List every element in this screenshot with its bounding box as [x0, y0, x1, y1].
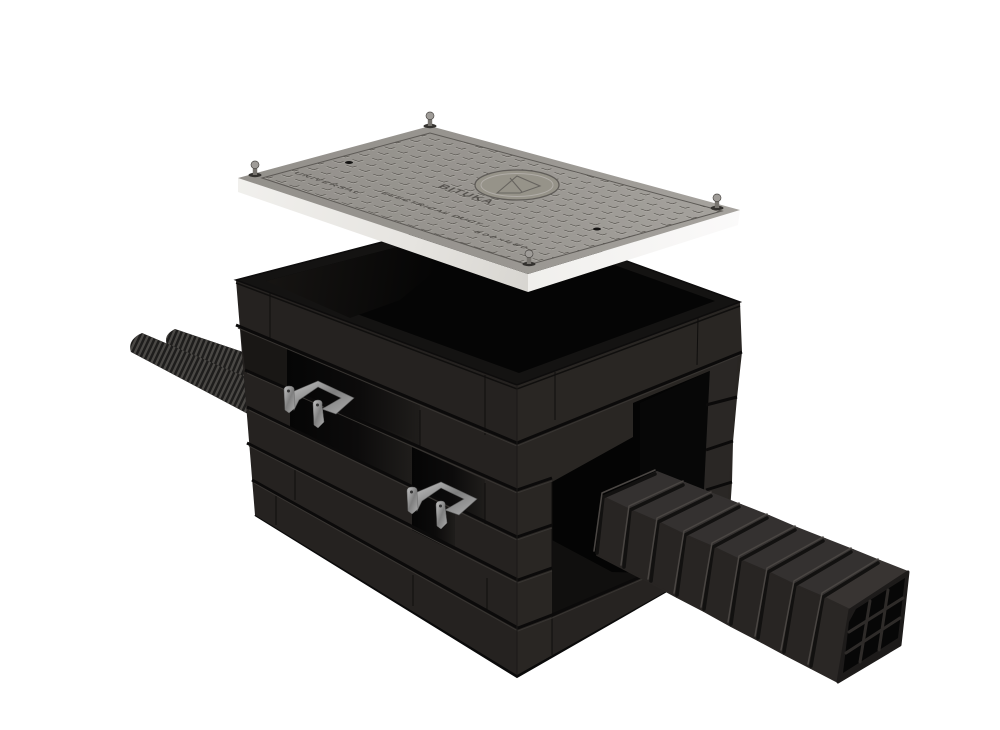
lower band under opening — [552, 573, 672, 655]
duct segment 4 — [674, 503, 769, 611]
right pillar — [703, 354, 738, 510]
duct segment 8 — [781, 548, 880, 668]
top rim band shading — [236, 283, 740, 389]
duct segment 5 — [701, 514, 797, 626]
manhole cover lid — [238, 112, 740, 292]
duct segment 1 — [594, 470, 685, 569]
base plate — [255, 515, 672, 677]
handle: upper — [284, 381, 354, 428]
open interior — [236, 213, 740, 385]
corrugated conduit pipes — [130, 329, 247, 414]
ribbed rectangular duct — [594, 470, 908, 682]
chamber box — [236, 213, 742, 677]
panel seams — [270, 293, 698, 655]
right face — [517, 302, 742, 675]
lid top surface — [238, 126, 740, 274]
lifting slots — [345, 161, 601, 230]
embossed lid text: 500×450 — [471, 230, 531, 249]
duct end face with grid of cells — [838, 572, 908, 682]
duct segment 3 — [648, 492, 741, 597]
illustration: cable chamber with lid and ducts — [130, 112, 910, 684]
stainless bolts — [248, 112, 724, 266]
right opening — [552, 370, 712, 617]
lid left edge — [238, 178, 528, 292]
lid right edge — [528, 210, 740, 292]
tread pattern — [262, 133, 722, 265]
embossed lid text — [291, 171, 531, 249]
corner seam — [516, 385, 518, 675]
embossed lid text: BITUKA — [435, 183, 498, 205]
handle: lower — [407, 482, 477, 529]
duct segment 9 — [808, 559, 908, 682]
duct segment 2 — [621, 481, 713, 583]
embossed lid text: UNIVERSAL — [291, 171, 365, 195]
embossed lid text: ELECTRICAL DUCT — [378, 191, 486, 226]
logo medallion — [475, 170, 559, 200]
duct segment 7 — [755, 537, 853, 654]
duct segment 6 — [728, 526, 825, 640]
horizontal ribs — [236, 325, 742, 631]
recess: upper handle — [240, 325, 420, 486]
left face — [236, 280, 517, 675]
recess: lower handle — [412, 447, 485, 552]
